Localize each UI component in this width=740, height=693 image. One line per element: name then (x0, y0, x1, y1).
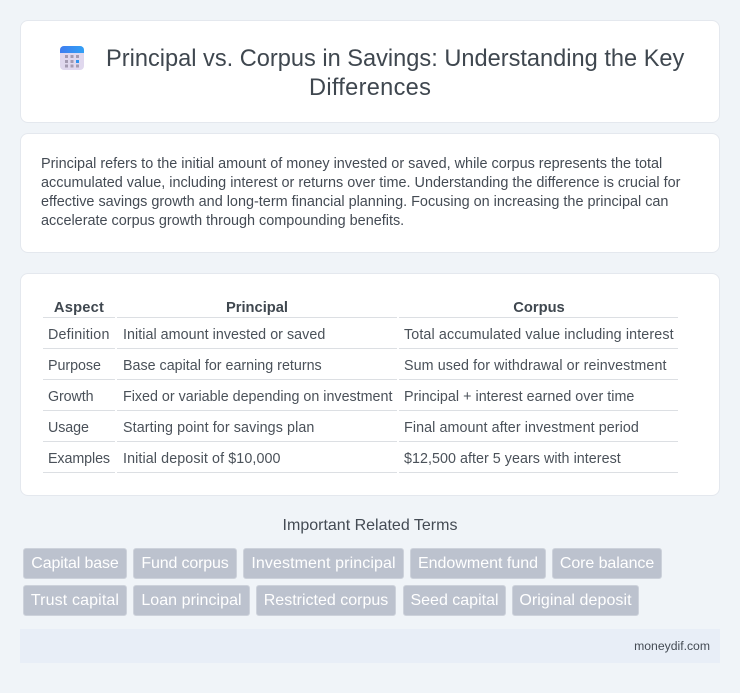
tag (512, 585, 639, 616)
tag (23, 585, 127, 616)
intro text: accelerate corpus growth through compounding benefits. (41, 213, 404, 229)
intro text: Principal refers to the initial amount of money invested or saved, while corpus represents the total (41, 156, 662, 172)
row: Usage: Usage (48, 420, 89, 436)
tag (552, 548, 662, 579)
tag (133, 548, 237, 579)
intro panel (20, 133, 720, 253)
icon: calendar (60, 46, 84, 70)
comparison table: Initial amount invested or saved (123, 327, 325, 343)
comparison table: Final amount after investment period (404, 420, 639, 436)
tag (256, 585, 396, 616)
tag (23, 548, 127, 579)
title: Principal vs. Corpus in Savings: Understanding the Key (106, 46, 684, 72)
tag (410, 548, 546, 579)
tag: Trust capital (31, 592, 119, 609)
tag: Seed capital (410, 592, 499, 609)
comparison table: Base capital for earning returns (123, 358, 322, 374)
intro text: accumulated value, including interest or returns over time. Understanding the difference is crucial for (41, 175, 680, 191)
row: Purpose: Purpose (48, 358, 101, 374)
header: Principal: Principal (226, 300, 288, 316)
tag: Investment principal (251, 555, 396, 572)
title: Differences (309, 75, 431, 101)
tag: Endowment fund (418, 555, 538, 572)
comparison table panel (20, 273, 720, 496)
tag (403, 585, 506, 616)
tag: Restricted corpus (264, 592, 388, 609)
tag (243, 548, 404, 579)
comparison table (43, 300, 678, 473)
row: Definition: Definition (48, 327, 110, 343)
tag: Capital base (31, 555, 119, 572)
comparison table: Fixed or variable depending on investment (123, 389, 392, 405)
related terms tags (23, 548, 662, 616)
comparison table: Sum used for withdrawal or reinvestment (404, 358, 667, 374)
header: Corpus: Corpus (513, 300, 565, 316)
comparison table: Starting point for savings plan (123, 420, 314, 436)
tag: Original deposit (519, 592, 632, 609)
intro text (41, 156, 680, 229)
row: Growth: Growth (48, 389, 93, 405)
comparison table: Principal + interest earned over time (404, 389, 634, 405)
header: Aspect: Aspect (54, 300, 104, 316)
related terms heading: Important Related Terms (283, 517, 457, 534)
tag: Loan principal (141, 592, 242, 609)
comparison table: Initial deposit of $10,000 (123, 451, 281, 467)
comparison table: $12,500 after 5 years with interest (404, 451, 621, 467)
header panel (20, 20, 720, 123)
footer bar (20, 629, 720, 663)
title (106, 46, 684, 101)
comparison table: Total accumulated value including interest (404, 327, 674, 343)
tag (133, 585, 250, 616)
row: Examples: Examples (48, 451, 110, 467)
tag: Core balance (560, 555, 654, 572)
intro text: effective savings growth and long-term financial planning. Focusing on increasing the principal can (41, 194, 668, 210)
tag: Fund corpus (141, 555, 229, 572)
footer source: moneydif.com (634, 639, 710, 653)
